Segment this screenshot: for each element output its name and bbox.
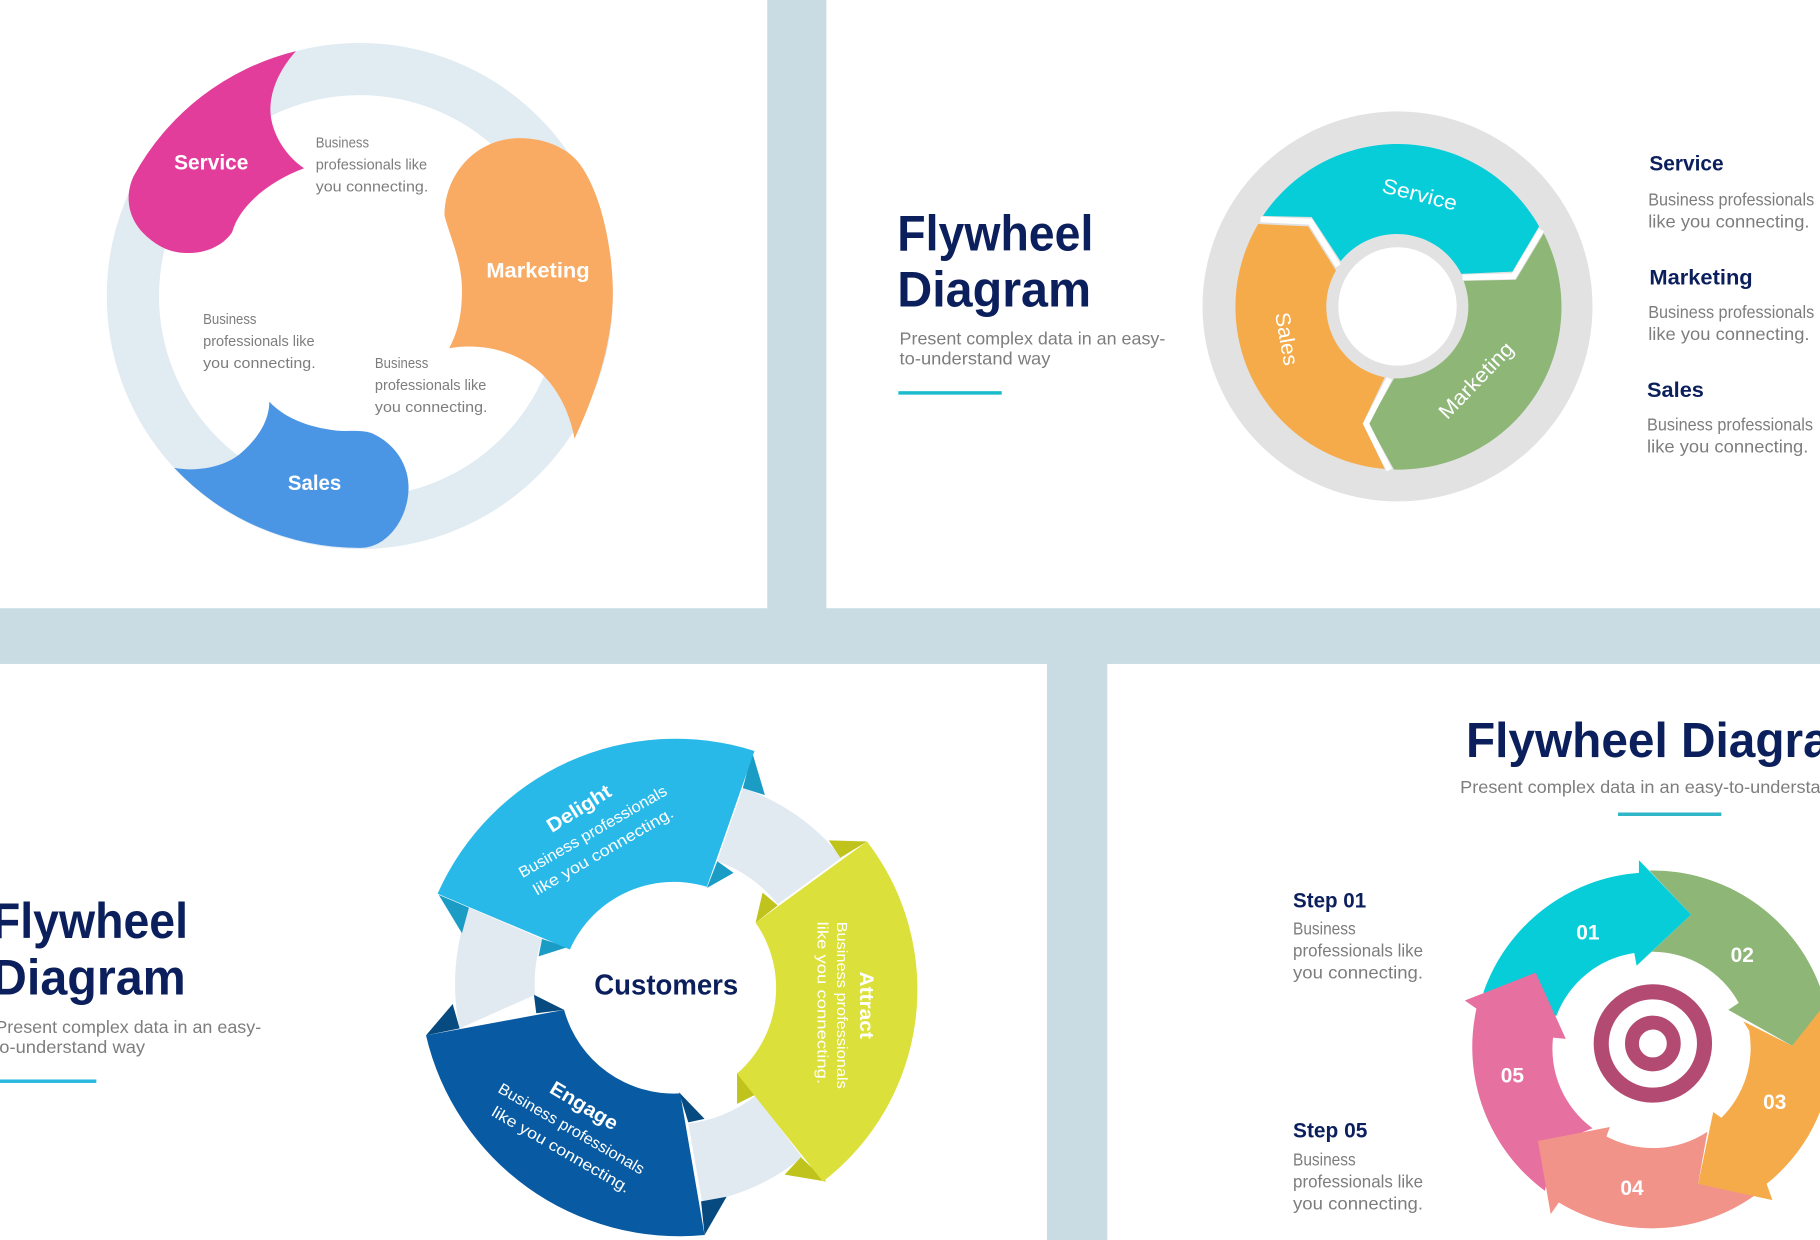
text block: marketing description [375, 355, 488, 416]
label: sales: Sales [288, 472, 341, 495]
text block: marketing description: professionals like [375, 377, 486, 394]
number labels: 01 [1576, 922, 1600, 945]
segment text: attract [813, 922, 877, 1089]
text block: service description: professionals like [316, 156, 427, 173]
segment text: engage: like you connecting. [489, 1104, 633, 1197]
title [0, 893, 188, 1006]
step 05 text: Step 05 [1293, 1120, 1368, 1143]
step 01 text: professionals like [1293, 940, 1423, 960]
segment: sales [1235, 224, 1385, 469]
arrow wheel [1465, 860, 1820, 1228]
attract folds [737, 840, 867, 1182]
panel: flywheel donut [826, 0, 1820, 608]
text block: marketing description: you connecting. [375, 399, 488, 416]
segment: attract [737, 842, 917, 1182]
segment text: attract: Attract [855, 972, 877, 1039]
segment: sales [174, 402, 409, 548]
subtitle [900, 329, 1165, 368]
segment: service [1263, 144, 1539, 274]
segment text: attract: like you connecting. [813, 922, 830, 1084]
list item: service: Service [1649, 153, 1724, 176]
title underline [0, 1079, 96, 1083]
step 01 text: you connecting. [1293, 962, 1423, 982]
donut label: sales: Sales [1270, 311, 1302, 367]
white separators [1261, 219, 1541, 470]
list item: marketing [1648, 266, 1814, 344]
number labels: 04 [1620, 1177, 1644, 1200]
title [897, 206, 1093, 317]
list item: service: like you connecting. [1648, 212, 1810, 232]
segment: delight [438, 739, 754, 949]
segment text: delight: like you connecting. [530, 805, 677, 899]
arrow 03 [1698, 996, 1820, 1200]
list item: sales [1647, 379, 1813, 457]
arrow 02 [1649, 871, 1820, 1046]
segment: marketing [445, 138, 613, 439]
list item: service [1648, 153, 1814, 232]
subtitle [0, 1017, 261, 1057]
segment text: delight: Delight [543, 780, 616, 837]
step 01 text [1293, 890, 1423, 982]
text block: sales description: you connecting. [203, 355, 316, 372]
text block: marketing description: Business [375, 355, 428, 372]
number labels [1501, 922, 1786, 1200]
title underline [1618, 813, 1721, 816]
step 05 text: Business [1293, 1149, 1356, 1169]
step 01 text: Step 01 [1293, 890, 1367, 913]
panel: flywheel teardrop ring [0, 0, 767, 608]
donut chart [1202, 111, 1592, 501]
title: Diagram [897, 261, 1091, 317]
number labels: 05 [1501, 1064, 1524, 1087]
list item: sales: like you connecting. [1647, 437, 1808, 457]
label: marketing: Marketing [486, 259, 590, 282]
segment: engage [426, 1010, 705, 1236]
segment text: delight: Business professionals [516, 783, 670, 882]
list item: marketing: Marketing [1649, 266, 1753, 289]
label: service: Service [174, 151, 248, 174]
subtitle: Present complex data in an easy- [900, 329, 1165, 349]
text block: sales description: professionals like [203, 333, 315, 350]
segment: marketing [1368, 233, 1561, 470]
list item: sales: Sales [1647, 379, 1704, 402]
subtitle: Present complex data in an easy- [0, 1017, 261, 1037]
text block: sales description [203, 311, 316, 372]
panel: flywheel customers [0, 664, 1047, 1240]
ribbon wheel [426, 739, 917, 1236]
subtitle: to-understand way [900, 348, 1050, 368]
step 05 text: you connecting. [1293, 1193, 1423, 1213]
segment text: attract: Business professionals [833, 922, 850, 1089]
segment: service [129, 51, 304, 253]
text block: service description [316, 134, 428, 196]
panel: flywheel steps [1107, 664, 1820, 1240]
segment text: engage: Business professionals [495, 1081, 647, 1178]
delight folds [439, 752, 765, 956]
icon: target [1601, 992, 1705, 1095]
step 05 text: professionals like [1293, 1171, 1423, 1191]
arrow 05 [1465, 973, 1592, 1191]
list item: sales: Business professionals [1647, 415, 1813, 435]
title underline [898, 391, 1002, 395]
center label: customers: Customers [594, 970, 738, 1002]
title: Flywheel [897, 206, 1093, 262]
segment text: engage: Engage [546, 1077, 622, 1135]
engage folds [426, 995, 727, 1235]
text block: service description: you connecting. [316, 179, 428, 196]
list item: marketing: like you connecting. [1648, 324, 1810, 344]
step 01 text: Business [1293, 918, 1356, 938]
number labels: 03 [1763, 1091, 1786, 1114]
arrow 01 [1483, 860, 1691, 1021]
text block: sales description: Business [203, 311, 257, 328]
background ring [133, 69, 587, 523]
donut label: service: Service [1380, 175, 1460, 215]
step 05 text [1293, 1120, 1423, 1213]
number labels: 02 [1731, 944, 1754, 967]
arrow 04 [1538, 1127, 1767, 1228]
donut label: marketing: Marketing [1434, 338, 1519, 424]
connector bands [455, 788, 842, 1203]
text block: service description: Business [316, 134, 369, 151]
